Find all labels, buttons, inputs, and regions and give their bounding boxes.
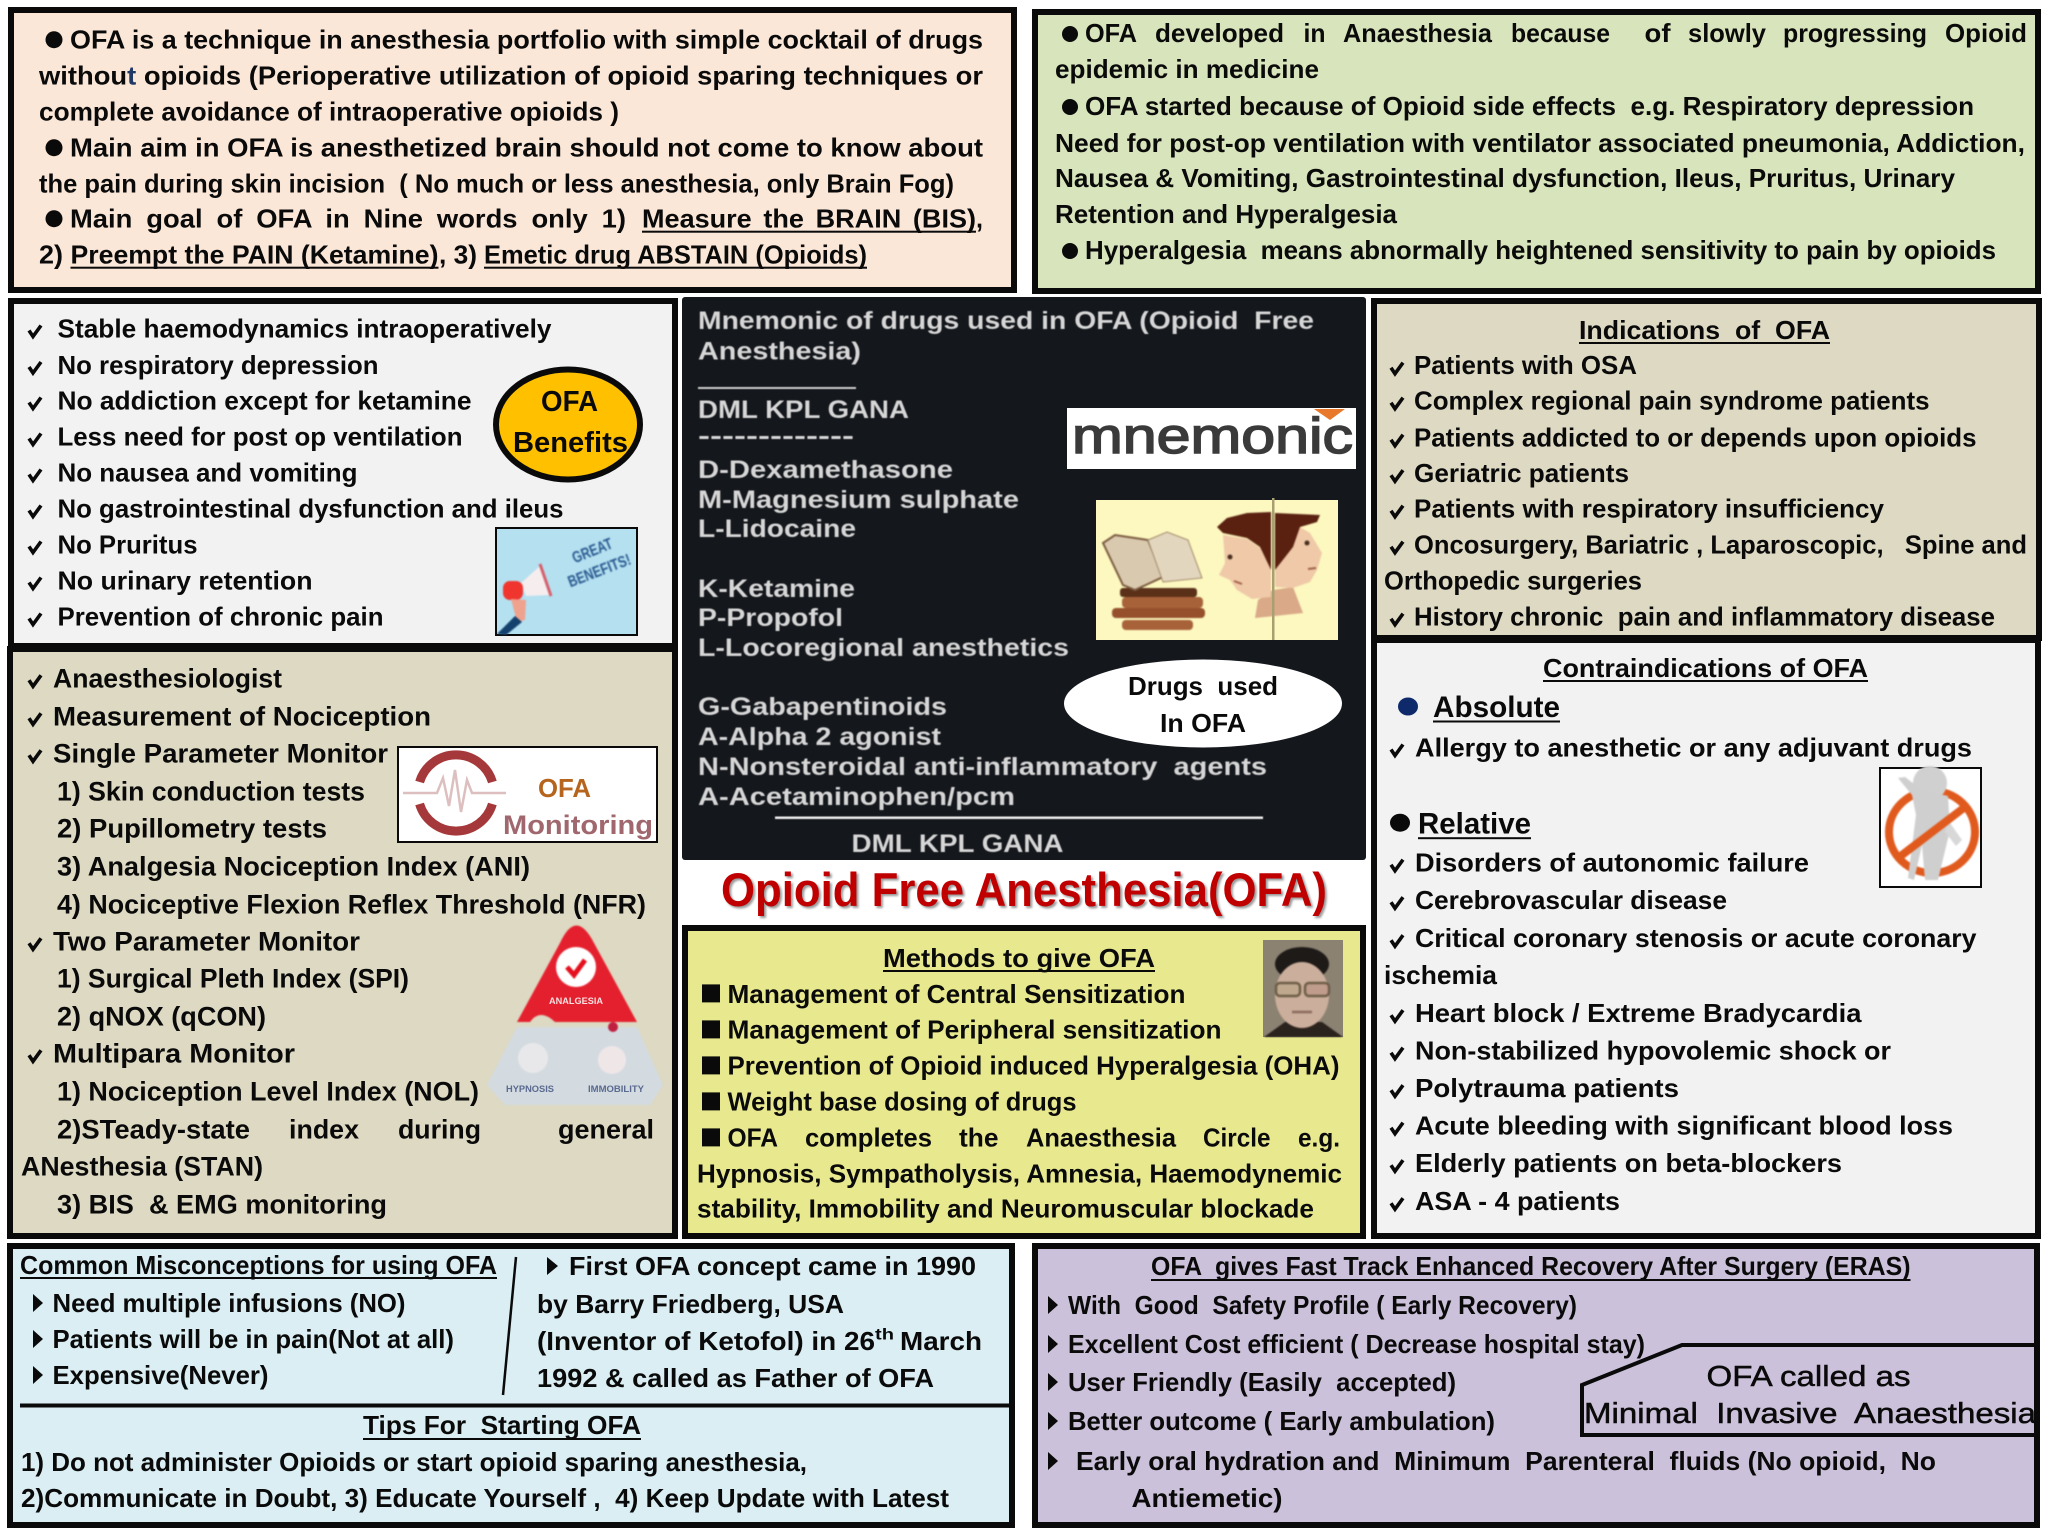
panel: ERAS — [1035, 1246, 2037, 1525]
heading: indications: Indications of OFA — [1579, 315, 1830, 345]
list: monitoring methods: Two Parameter Monitor — [53, 926, 361, 956]
text block: opioid side effects: Nausea & Vomiting, Gastrointestinal dysfunction, Ileus, Pruritus, Urinary — [1055, 163, 1956, 193]
list: monitoring methods: 2) qNOX (qCON) — [57, 1001, 266, 1031]
list: methods: Circle — [1203, 1122, 1270, 1152]
text block: opioid side effects: in — [1304, 18, 1326, 48]
panel: indications of OFA — [1374, 301, 2039, 638]
list: monitoring methods: 1) Nociception Level Index (NOL) — [57, 1076, 479, 1106]
badge: OFA Benefits: OFA — [541, 386, 598, 418]
icon: OFA monitoring logo: OFA — [538, 773, 591, 803]
text block: opioid side effects: Hyperalgesia means abnormally heightened sensitivity to pain by opioids — [1085, 235, 1996, 265]
list: monitoring methods: Single Parameter Monitor — [53, 738, 388, 768]
text block: first OFA concept: First OFA concept came in 1990 — [569, 1251, 976, 1281]
text block: opioid side effects: progressing — [1783, 18, 1927, 48]
text block: opioid side effects: OFA started because of Opioid side effects e.g. Respiratory depression — [1085, 91, 1974, 121]
heading: ERAS: OFA gives Fast Track Enhanced Recovery After Surgery (ERAS) — [1151, 1251, 1910, 1281]
list: benefits: No addiction except for ketamine — [58, 386, 472, 416]
list: monitoring methods: ANesthesia (STAN) — [21, 1151, 263, 1181]
list: ERAS benefits — [1048, 1290, 1936, 1513]
text block: OFA definition and aim: Measure the BRAIN (BIS) — [642, 204, 976, 234]
label: mnemonic sign: mnemonic — [1072, 408, 1353, 464]
text block: OFA definition and aim: 2) — [39, 240, 63, 270]
list: relative contraindications: Non-stabilized hypovolemic shock or — [1415, 1036, 1891, 1066]
text block: first OFA concept: (Inventor of Ketofol) in 26 — [537, 1326, 875, 1356]
title: Opioid Free Anesthesia(OFA) — [721, 863, 1327, 916]
icon: books and two heads — [1096, 498, 1338, 640]
list: relative contraindications: Polytrauma patients — [1415, 1073, 1679, 1103]
list: relative contraindications: Heart block / Extreme Bradycardia — [1415, 998, 1862, 1028]
text block: OFA definition and aim — [38, 25, 983, 270]
icon: analgesia triangle: HYPNOSIS — [506, 1084, 554, 1094]
icon: megaphone great benefits — [496, 528, 637, 635]
list: relative contraindications: Relative — [1418, 808, 1531, 841]
list: monitoring methods: 3) BIS & EMG monitoring — [57, 1189, 387, 1219]
list: benefits: Stable haemodynamics intraoperatively — [58, 314, 552, 344]
icon: OFA monitoring logo: Monitoring — [503, 810, 653, 840]
icon: megaphone great benefits: BENEFITS! — [566, 552, 633, 591]
callout: minimal invasive anaesthesia: OFA called as — [1706, 1361, 1910, 1393]
icon: megaphone great benefits: GREAT — [570, 536, 615, 567]
list: absolute contraindications: Absolute — [1433, 691, 1560, 724]
list: indications: Patients with respiratory insufficiency — [1414, 494, 1885, 524]
callout: drugs used in OFA: Drugs used — [1128, 671, 1278, 701]
list: monitoring methods — [21, 663, 654, 1219]
list: monitoring methods: 2)STeady-state — [57, 1114, 250, 1144]
list: relative contraindications: Cerebrovascular disease — [1415, 885, 1727, 915]
list: ERAS benefits: Better outcome ( Early ambulation) — [1068, 1406, 1495, 1436]
text block: opioid side effects: slowly — [1688, 18, 1767, 48]
callout: drugs used in OFA: In OFA — [1160, 708, 1246, 738]
icon: portrait — [1263, 940, 1343, 1037]
text block: common misconceptions: Common Misconceptions for using OFA — [20, 1250, 497, 1280]
panel: OFA benefits — [11, 301, 675, 646]
list: monitoring methods: index — [289, 1114, 359, 1144]
list: methods: completes — [805, 1122, 932, 1152]
text block: opioid side effects: Anaesthesia — [1343, 18, 1493, 48]
list: indications: Complex regional pain syndrome patients — [1414, 386, 1930, 416]
list: monitoring methods: 1) Surgical Pleth Index (SPI) — [57, 963, 409, 993]
list: methods: the — [959, 1122, 998, 1152]
list: indications: Patients with OSA — [1414, 350, 1637, 380]
callout: minimal invasive anaesthesia — [1582, 1345, 2037, 1435]
text block: OFA definition and aim: without opioids (Perioperative utilization of opioid sparing techniques or — [38, 61, 983, 91]
text block: common misconceptions: Patients will be in pain(Not at all) — [52, 1324, 454, 1354]
text block: drug mnemonic list: M-Magnesium sulphate — [698, 486, 1019, 514]
text block: tips for starting OFA — [21, 1410, 949, 1513]
text block: drug mnemonic list: Anesthesia) — [698, 338, 861, 366]
text block: drug mnemonic list: A-Acetaminophen/pcm — [698, 783, 1015, 811]
callout: minimal invasive anaesthesia: Minimal Invasive Anaesthesia — [1584, 1398, 2037, 1430]
text block: common misconceptions: Need multiple infusions (NO) — [52, 1288, 406, 1318]
list: methods: Anaesthesia — [1026, 1122, 1177, 1152]
list: relative contraindications: Elderly patients on beta-blockers — [1415, 1148, 1842, 1178]
icon: analgesia triangle: ANALGESIA — [549, 996, 603, 1006]
icon: no-entry figure — [1880, 766, 1981, 887]
text block: drug mnemonic list: A-Alpha 2 agonist — [698, 723, 942, 751]
panel: what is OFA — [11, 10, 1014, 290]
list: benefits: No Pruritus — [58, 530, 198, 560]
list: relative contraindications: Disorders of autonomic failure — [1415, 848, 1809, 878]
list: ERAS benefits: Early oral hydration and Minimum Parenteral fluids (No opioid, No — [1076, 1446, 1936, 1476]
list: ERAS benefits: Excellent Cost efficient ( Decrease hospital stay) — [1068, 1329, 1645, 1359]
list: methods: e.g. — [1298, 1122, 1340, 1152]
list: ERAS benefits: With Good Safety Profile ( Early Recovery) — [1068, 1290, 1577, 1320]
list: absolute contraindications: Allergy to anesthetic or any adjuvant drugs — [1415, 732, 1972, 762]
text block: OFA definition and aim: , — [976, 204, 983, 234]
list: ERAS benefits: Antiemetic) — [1132, 1483, 1282, 1513]
text block: OFA definition and aim: OFA is a technique in anesthesia portfolio with simple cocktail of drugs — [70, 25, 983, 55]
text block: opioid side effects: Opioid — [1945, 18, 2027, 48]
list: indications: Oncosurgery, Bariatric , Laparoscopic, Spine and — [1414, 530, 2027, 560]
text block: opioid side effects: Retention and Hyperalgesia — [1055, 199, 1398, 229]
list: methods: Management of Central Sensitization — [728, 979, 1186, 1009]
text block: OFA definition and aim: Preempt the PAIN (Ketamine) — [70, 240, 438, 270]
list: monitoring methods: Anaesthesiologist — [53, 663, 282, 693]
text block: first OFA concept: March — [900, 1326, 982, 1356]
text block: drug mnemonic list: D-Dexamethasone — [698, 456, 953, 484]
text block: opioid side effects — [1055, 18, 2027, 265]
list: indications — [1384, 350, 2027, 632]
list: relative contraindications: ASA - 4 patients — [1415, 1186, 1620, 1216]
list: indications: Patients addicted to or depends upon opioids — [1414, 423, 1976, 453]
text block: drug mnemonic list: L-Locoregional anesthetics — [698, 634, 1069, 662]
panel: misconceptions and tips — [10, 1246, 1012, 1525]
text block: drug mnemonic list: Mnemonic of drugs used in OFA (Opioid Free — [698, 307, 1314, 335]
text block: drug mnemonic list: K-Ketamine — [698, 575, 855, 603]
text block: OFA definition and aim: complete avoidance of intraoperative opioids ) — [39, 97, 619, 127]
list: monitoring methods: 3) Analgesia Nociception Index (ANI) — [57, 851, 530, 881]
panel: mnemonic of drugs — [682, 297, 1366, 860]
list: indications: Orthopedic surgeries — [1384, 566, 1642, 596]
text block: drug mnemonic list: L-Lidocaine — [698, 515, 856, 543]
text block: drug mnemonic list: P-Propofol — [698, 604, 843, 632]
icon: OFA monitoring logo — [398, 747, 657, 842]
text block: opioid side effects: Need for post-op ventilation with ventilator associated pneumonia, Addiction, — [1055, 128, 2025, 158]
list: indications: History chronic pain and inflammatory disease — [1414, 602, 1995, 632]
list: monitoring methods: general — [558, 1114, 654, 1144]
text block: common misconceptions: Expensive(Never) — [52, 1360, 268, 1390]
list: methods — [697, 979, 1342, 1223]
text block: drug mnemonic list: N-Nonsteroidal anti-inflammatory agents — [698, 753, 1267, 781]
panel: methods to give OFA — [685, 928, 1363, 1236]
text block: tips for starting OFA: Tips For Starting OFA — [363, 1410, 641, 1440]
list: monitoring methods: Measurement of Nociception — [53, 701, 431, 731]
list: monitoring methods: during — [398, 1114, 481, 1144]
list: monitoring methods: 4) Nociceptive Flexion Reflex Threshold (NFR) — [57, 889, 646, 919]
panel: OFA monitoring — [10, 649, 675, 1236]
list: benefits: No urinary retention — [58, 566, 312, 596]
text block: OFA definition and aim: , 3) — [439, 240, 477, 270]
list: relative contraindications: Critical coronary stenosis or acute coronary — [1415, 923, 1977, 953]
panel: why OFA developed — [1035, 12, 2038, 291]
text block: OFA definition and aim: Main goal of OFA in Nine words only 1) — [70, 204, 626, 234]
icon: analgesia triangle: IMMOBILITY — [588, 1084, 644, 1094]
text block: opioid side effects: OFA — [1085, 18, 1137, 48]
list: benefits: Less need for post op ventilation — [58, 422, 462, 452]
list: ERAS benefits: User Friendly (Easily accepted) — [1068, 1367, 1456, 1397]
callout: drugs used in OFA — [1064, 660, 1342, 748]
list: monitoring methods: Multipara Monitor — [53, 1038, 296, 1068]
text block: first OFA concept — [537, 1251, 982, 1393]
text block: drug mnemonic list: DML KPL GANA — [698, 396, 909, 424]
text block: common misconceptions — [20, 1250, 497, 1390]
text block: drug mnemonic list: ------------- — [698, 422, 854, 450]
text block: drug mnemonic list — [698, 307, 1314, 858]
list: benefits: No respiratory depression — [58, 350, 378, 380]
text block: opioid side effects: developed — [1155, 18, 1284, 48]
text block: opioid side effects: because — [1511, 18, 1610, 48]
list: methods: Weight base dosing of drugs — [728, 1086, 1076, 1116]
heading: methods: Methods to give OFA — [883, 943, 1155, 973]
text block: opioid side effects: epidemic in medicine — [1055, 54, 1319, 84]
badge: OFA Benefits — [496, 370, 640, 480]
list: methods: Hypnosis, Sympatholysis, Amnesia, Haemodynemic — [697, 1158, 1342, 1188]
icon: analgesia triangle — [487, 926, 663, 1105]
list: methods: stability, Immobility and Neuromuscular blockade — [697, 1193, 1314, 1223]
badge: OFA Benefits: Benefits — [513, 427, 628, 459]
text block: tips for starting OFA: 2)Communicate in Doubt, 3) Educate Yourself , 4) Keep Update with Latest — [21, 1483, 949, 1513]
list: indications: Geriatric patients — [1414, 458, 1629, 488]
list: methods: Prevention of Opioid induced Hyperalgesia (OHA) — [728, 1050, 1340, 1080]
text block: drug mnemonic list: G-Gabapentinoids — [698, 693, 947, 721]
list: monitoring methods: 1) Skin conduction tests — [57, 776, 365, 806]
text block: first OFA concept: 1992 & called as Father of OFA — [537, 1363, 934, 1393]
list: relative contraindications: Acute bleeding with significant blood loss — [1415, 1111, 1953, 1141]
panel: contraindications of OFA — [1374, 640, 2038, 1236]
text block: OFA definition and aim: Emetic drug ABSTAIN (Opioids) — [484, 240, 867, 270]
list: methods: Management of Peripheral sensitization — [728, 1014, 1222, 1044]
list: absolute contraindications — [1391, 691, 1972, 762]
list: benefits — [29, 314, 564, 632]
text block: OFA definition and aim: Main aim in OFA is anesthetized brain should not come to know about — [70, 133, 983, 163]
list: benefits: No nausea and vomiting — [58, 458, 358, 488]
list: relative contraindications — [1384, 808, 1977, 1216]
list: methods: OFA — [728, 1122, 778, 1152]
text block: opioid side effects: of — [1644, 18, 1671, 48]
list: monitoring methods: 2) Pupillometry tests — [57, 813, 327, 843]
heading: contraindications: Contraindications of OFA — [1543, 653, 1868, 683]
list: benefits: Prevention of chronic pain — [58, 602, 384, 632]
text block: OFA definition and aim: the pain during skin incision ( No much or less anesthesia, only Brain Fog) — [39, 169, 954, 199]
text block: first OFA concept: th — [875, 1326, 894, 1344]
list: benefits: No gastrointestinal dysfunction and ileus — [58, 494, 564, 524]
text block: first OFA concept: by Barry Friedberg, USA — [537, 1289, 844, 1319]
text block: tips for starting OFA: 1) Do not administer Opioids or start opioid sparing anesthesia, — [21, 1447, 807, 1477]
text block: drug mnemonic list: DML KPL GANA — [852, 830, 1064, 858]
list: relative contraindications: ischemia — [1384, 960, 1498, 990]
